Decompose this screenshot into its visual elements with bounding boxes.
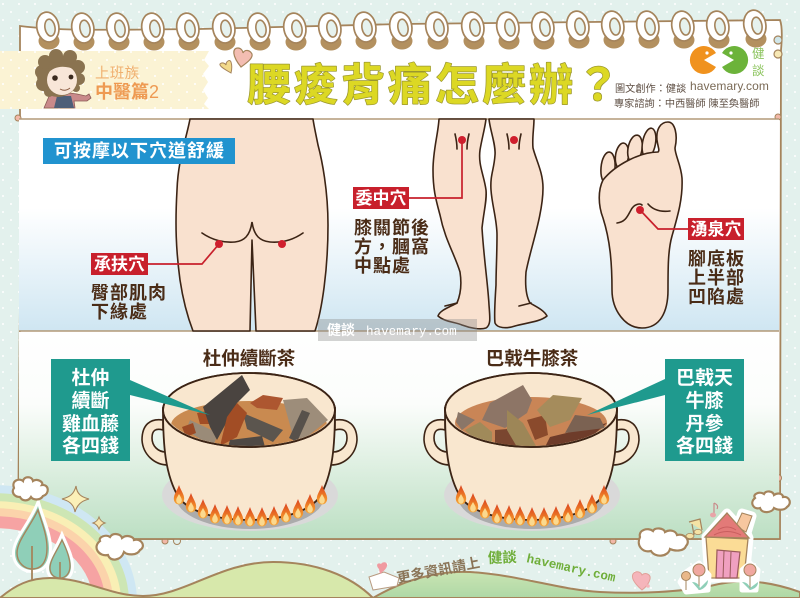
icon: green pac-man <box>722 46 748 74</box>
point: 承扶穴: 承扶穴 <box>94 254 145 274</box>
point: 承扶穴: 下緣處 <box>91 302 148 322</box>
point: 承扶穴 <box>91 240 286 322</box>
spiral binding rings <box>34 8 768 50</box>
heading: massage points: 可按摩以下穴道舒緩 <box>54 140 225 161</box>
icon: hearts <box>220 48 252 73</box>
point: 湧泉穴: 腳底板 <box>688 248 745 269</box>
point: 湧泉穴: 湧泉穴 <box>690 219 742 239</box>
callout: ingredients two: 牛膝 <box>685 390 724 412</box>
point: 湧泉穴: 上半部 <box>688 267 745 288</box>
icon: envelope with heart <box>369 562 399 590</box>
illustration: legs <box>433 119 547 329</box>
callout: ingredients two: 丹參 <box>685 412 724 435</box>
logo: havemary.com <box>690 79 769 93</box>
footer text: havemary.com <box>525 552 617 586</box>
point: 湧泉穴 <box>636 206 745 307</box>
watermark: havemary.com <box>366 325 457 339</box>
character: lady with curly hair <box>35 49 91 108</box>
watermark <box>318 319 477 341</box>
point: 委中穴: 膝關節後 <box>354 217 430 238</box>
banner text: 上班族 <box>95 65 139 82</box>
callout: ingredients one: 各四錢 <box>62 434 119 457</box>
point: 委中穴: 中點處 <box>354 256 411 276</box>
pot contents: herbs <box>455 385 607 449</box>
illustration: pot two <box>424 373 639 531</box>
heading: 杜仲續斷茶: 杜仲續斷茶 <box>203 348 296 369</box>
icon: music notes <box>686 503 718 539</box>
footer text: 健談 <box>488 548 518 567</box>
watermark: 健談 <box>327 322 355 338</box>
icon: sparkle large <box>62 486 89 512</box>
cloud: left top <box>13 477 48 500</box>
callout: ingredients one: 杜仲 <box>71 367 110 389</box>
heading: massage points <box>43 138 235 164</box>
point: 委中穴: 方，膕窩 <box>354 236 430 257</box>
callout: ingredients one: 續斷 <box>71 390 110 412</box>
panel: herbal teas <box>19 332 779 539</box>
banner: category ribbon: 中醫篇2 <box>95 81 159 102</box>
illustration: hips <box>176 119 328 331</box>
icon: sparkle small <box>93 517 105 529</box>
cloud: left bottom <box>96 534 143 560</box>
credits: 專家諮詢：中西醫師 陳至奐醫師 <box>614 97 759 110</box>
illustration: house <box>680 513 758 592</box>
illustration: trees <box>15 506 71 582</box>
footer text: 更多資訊請上 <box>396 554 481 586</box>
logo <box>690 46 769 93</box>
credits <box>614 82 759 110</box>
callout: ingredients one: 雞血藤 <box>62 413 119 435</box>
banner: category ribbon <box>0 49 209 109</box>
callout: ingredients two: 巴戟天 <box>676 367 733 389</box>
illustration: foot sole <box>599 122 682 328</box>
logo: 談 <box>752 64 765 78</box>
flames <box>174 485 327 526</box>
icon: pink heart <box>632 572 650 590</box>
point: 湧泉穴: 凹陷處 <box>688 287 745 307</box>
callout: ingredients two: 各四錢 <box>676 434 733 457</box>
cloud: right bottom <box>639 528 688 556</box>
cloud: right top <box>752 491 790 512</box>
point: 委中穴: 委中穴 <box>356 188 406 208</box>
credits: 圖文創作：健談 <box>615 82 686 95</box>
illustration: pot one <box>142 373 357 531</box>
page bottom edge <box>18 538 780 540</box>
illustration: rainbow <box>0 485 137 600</box>
flames <box>456 485 609 526</box>
point: 委中穴 <box>353 136 518 276</box>
footer text <box>396 548 617 586</box>
panel: acupressure points <box>19 119 779 331</box>
logo: 健 <box>752 47 765 61</box>
callout: ingredients two <box>587 359 744 461</box>
illustration: hills <box>0 562 800 600</box>
heading: 巴戟牛膝茶: 巴戟牛膝茶 <box>486 348 579 369</box>
title: 腰痠背痛怎麼辦？ <box>247 61 623 110</box>
point: 承扶穴: 臀部肌肉 <box>91 282 167 303</box>
callout: ingredients one <box>51 359 210 461</box>
icon: orange pac-man <box>690 46 716 74</box>
pot contents: herbs <box>171 375 328 449</box>
flowers <box>680 563 758 592</box>
